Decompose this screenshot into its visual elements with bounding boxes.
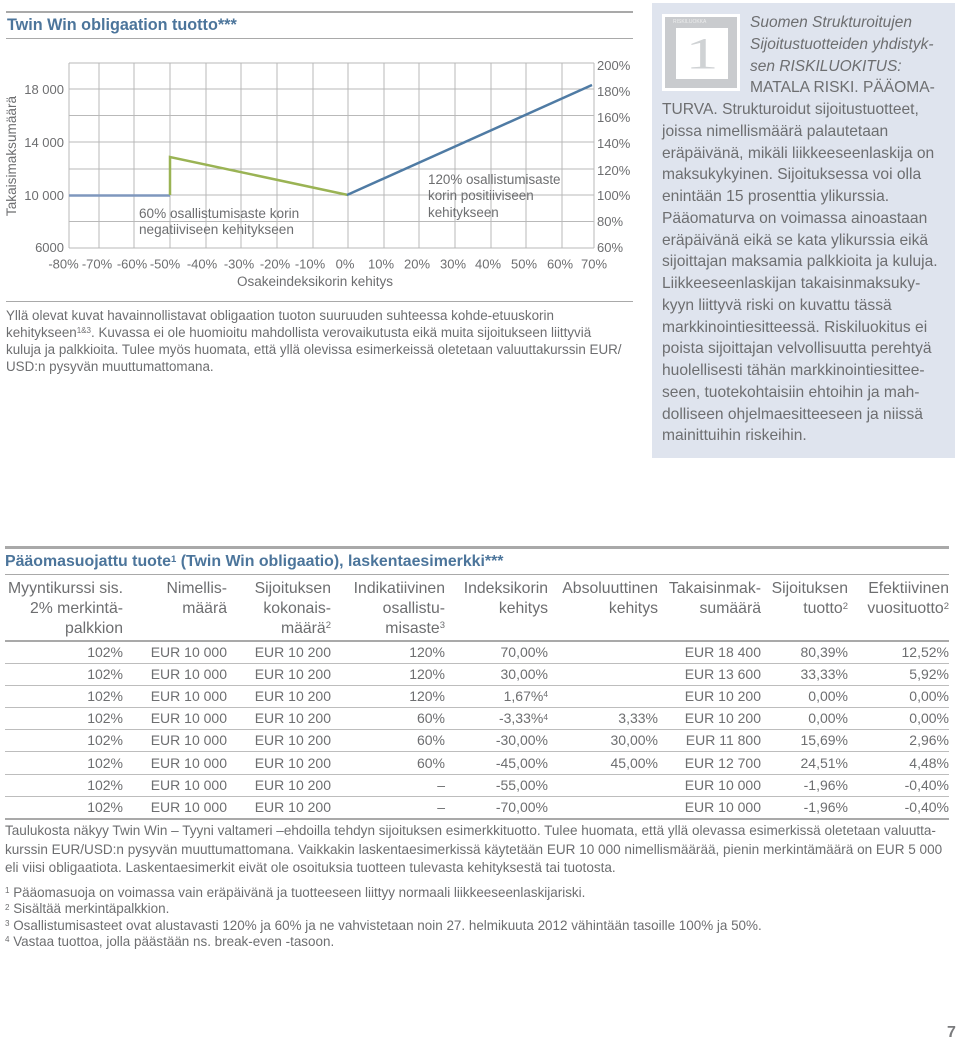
table: calculation examples: -55,00% bbox=[496, 777, 548, 793]
x axis labels: -60% bbox=[117, 256, 148, 272]
table: calculation examples: kehitys bbox=[499, 600, 548, 617]
heading: table title: Pääomasuojattu tuote1 (Twin Win obligaatio), laskentaesimerkki*** bbox=[5, 553, 503, 570]
table: calculation examples: EUR 10 000 bbox=[151, 644, 227, 660]
table: calculation examples: määrä2 bbox=[281, 620, 331, 637]
text: risk description: mainittuihin riskeihin. bbox=[662, 427, 807, 444]
table: calculation examples: 1,67%4 bbox=[504, 688, 548, 704]
text: table explanation: Taulukosta näkyy Twin Win – Tyyni valtameri –ehdoilla tehdyn sijoituksen esimerkkituotto. Tulee huomata, että yllä olevassa esimerkissä oletetaan valuutta- bbox=[5, 823, 936, 838]
table: calculation examples: 0,00% bbox=[808, 710, 848, 726]
text: footnotes: 4 Vastaa tuottoa, jolla päästään ns. break-even -tasoon. bbox=[5, 934, 334, 949]
right axis labels: 120% bbox=[597, 163, 631, 178]
text: table explanation: eli viisi obligaatiota. Laskentaesimerkit eivät ole osoituksia tuotteen tulevasta kehityksestä tai tuotosta. bbox=[5, 860, 616, 875]
table: calculation examples: 24,51% bbox=[801, 755, 848, 771]
right axis labels: 160% bbox=[597, 110, 631, 125]
text: table explanation bbox=[5, 823, 942, 875]
annotation: negative participation: negatiiviseen kehitykseen bbox=[139, 222, 294, 237]
text: chart explanation: USD:n pysyvän muuttumattomana. bbox=[6, 359, 214, 374]
table: calculation examples: EUR 10 200 bbox=[255, 799, 331, 815]
icon: risk class 1 bbox=[662, 14, 740, 91]
text: risk description: dolliseen ohjelmaesitteeseen ja niissä bbox=[662, 406, 923, 422]
table: calculation examples: EUR 10 000 bbox=[151, 732, 227, 748]
text: risk description: seen, tuotekohtaisiin ehtoihin ja mah- bbox=[662, 384, 919, 401]
table: calculation examples: – bbox=[437, 799, 445, 815]
table: calculation examples: EUR 10 200 bbox=[685, 688, 761, 704]
text: risk description: MATALA RISKI. PÄÄOMA- bbox=[750, 79, 935, 96]
table: calculation examples: 4,48% bbox=[909, 755, 949, 771]
table: calculation examples: Absoluuttinen bbox=[562, 580, 658, 597]
text: risk description: TURVA. Strukturoidut sijoitustuotteet, bbox=[662, 101, 919, 118]
panel: twin win chart section bbox=[4, 11, 633, 374]
text: footnotes: 2 Sisältää merkintäpalkkion. bbox=[5, 901, 169, 916]
table: calculation examples: 33,33% bbox=[801, 666, 848, 682]
x axis labels: 70% bbox=[581, 256, 607, 272]
table: calculation examples: EUR 10 000 bbox=[151, 688, 227, 704]
table: calculation examples: -3,33%4 bbox=[499, 710, 548, 726]
table: calculation examples: määrä bbox=[182, 600, 227, 617]
table: calculation examples: 12,52% bbox=[902, 644, 949, 660]
table: calculation examples: Myyntikurssi sis. bbox=[8, 580, 123, 597]
table: calculation examples: -0,40% bbox=[905, 799, 949, 815]
x axis title: Osakeindeksikorin kehitys bbox=[237, 274, 393, 289]
text: risk description: Pääomaturva on voimassa ainoastaan bbox=[662, 210, 927, 227]
table: calculation examples: 80,39% bbox=[801, 644, 848, 660]
table: calculation examples: 45,00% bbox=[611, 755, 658, 771]
right axis labels: 100% bbox=[597, 188, 631, 203]
table: calculation examples: osallistu- bbox=[383, 600, 445, 617]
panel: calculation example section bbox=[5, 546, 949, 949]
table: calculation examples: vuosituotto2 bbox=[867, 600, 949, 617]
panel: risk classification bbox=[652, 3, 955, 458]
text: risk description: eräpäivänä, mikäli liikkeeseenlaskija on bbox=[662, 144, 934, 162]
text: table explanation: kurssin EUR/USD:n pysyvän muuttumattomana. Vaikkakin laskentaesimerkissä käytetään EUR 10 000 nimellismäärää, pienin merkintämäärä on EUR 5 000 bbox=[5, 842, 942, 856]
x axis labels: 40% bbox=[475, 256, 501, 272]
table: calculation examples: EUR 12 700 bbox=[685, 755, 761, 771]
table: calculation examples: EUR 10 200 bbox=[255, 710, 331, 726]
text: risk description: joissa nimellismäärä palautetaan bbox=[662, 123, 888, 140]
table: calculation examples: EUR 10 200 bbox=[255, 755, 331, 771]
table: calculation examples: 2% merkintä- bbox=[30, 600, 123, 617]
text: risk description: Suomen Strukturoitujen bbox=[750, 14, 912, 31]
table: calculation examples: 15,69% bbox=[801, 732, 848, 748]
line chart bbox=[4, 58, 631, 289]
table: calculation examples: EUR 10 200 bbox=[255, 688, 331, 704]
table: calculation examples: kokonais- bbox=[263, 600, 331, 617]
table: calculation examples: kehitys bbox=[609, 600, 658, 617]
table: calculation examples: 3,33% bbox=[618, 710, 658, 726]
text: risk description: markkinointiesitteessä. Riskiluokitus ei bbox=[662, 318, 927, 336]
x axis labels: -10% bbox=[295, 256, 326, 272]
table: calculation examples: misaste3 bbox=[385, 620, 445, 637]
text: risk description: maksukykyinen. Sijoituksessa voi olla bbox=[662, 166, 921, 183]
table: calculation examples: -45,00% bbox=[496, 755, 548, 771]
table: calculation examples: 102% bbox=[87, 732, 123, 748]
left axis labels: 6000 bbox=[35, 240, 64, 255]
table: calculation examples: EUR 18 400 bbox=[685, 644, 761, 660]
table: calculation examples: tuotto2 bbox=[803, 600, 848, 617]
table: calculation examples: EUR 10 200 bbox=[255, 644, 331, 660]
right axis labels: 200% bbox=[597, 58, 631, 73]
table: calculation examples: 30,00% bbox=[611, 732, 658, 748]
table: calculation examples: EUR 10 000 bbox=[151, 755, 227, 771]
table: calculation examples: 102% bbox=[87, 644, 123, 660]
table: calculation examples: 60% bbox=[417, 755, 445, 771]
text: risk description: Liikkeeseenlaskijan takaisinmaksuky- bbox=[662, 275, 920, 292]
table: calculation examples: 0,00% bbox=[909, 688, 949, 704]
right axis labels: 60% bbox=[597, 240, 623, 255]
text: chart explanation: kuluja ja palkkioita. Tulee myös huomata, että yllä olevissa esimerkeissä oletetaan valuuttakurssin EUR/ bbox=[6, 342, 622, 357]
right axis labels: 180% bbox=[597, 84, 631, 99]
text: footnotes: 1 Pääomasuoja on voimassa vain eräpäivänä ja tuotteeseen liittyy normaali liikkeeseenlaskijariski. bbox=[5, 885, 585, 900]
x axis labels: 20% bbox=[404, 256, 430, 272]
table: calculation examples: EUR 11 800 bbox=[686, 732, 761, 748]
text: risk description: huolellisesti tähän markkinointiesittee- bbox=[662, 362, 925, 379]
left axis labels: 14 000 bbox=[24, 135, 64, 150]
table: calculation examples: Sijoituksen bbox=[255, 580, 331, 597]
left axis labels bbox=[24, 82, 64, 255]
heading: chart title: Twin Win obligaation tuotto*** bbox=[7, 16, 237, 34]
table: calculation examples: 120% bbox=[409, 688, 445, 704]
icon: risk class 1: RISKILUOKKA bbox=[673, 19, 706, 25]
table: calculation examples: -1,96% bbox=[804, 777, 848, 793]
table: calculation examples: Sijoituksen bbox=[772, 580, 848, 597]
table: calculation examples: 102% bbox=[87, 688, 123, 704]
x axis labels: -70% bbox=[82, 256, 113, 272]
table: calculation examples: EUR 10 000 bbox=[151, 666, 227, 682]
table: calculation examples: 102% bbox=[87, 777, 123, 793]
text: footnotes bbox=[5, 885, 762, 949]
right axis labels: 80% bbox=[597, 214, 623, 229]
x axis labels: 0% bbox=[336, 256, 355, 272]
x axis labels: -40% bbox=[187, 256, 218, 272]
text: risk description bbox=[662, 14, 938, 444]
left axis title: Takaisimaksumäärä bbox=[4, 96, 19, 216]
table: calculation examples: 102% bbox=[87, 666, 123, 682]
table: calculation examples: -30,00% bbox=[496, 732, 548, 748]
text: risk description: sijoittajan maksamia palkkioita ja kuluja. bbox=[662, 253, 938, 270]
text: footnotes: 3 Osallistumisasteet ovat alustavasti 120% ja 60% ja ne vahvistetaan noin 27. helmikuuta 2012 vähintään tasoille 100% ja 50%. bbox=[5, 918, 762, 933]
table: calculation examples: 30,00% bbox=[501, 666, 548, 682]
x axis labels: 10% bbox=[368, 256, 394, 272]
left axis labels: 10 000 bbox=[24, 188, 64, 203]
table: calculation examples: 0,00% bbox=[808, 688, 848, 704]
table: calculation examples: Indeksikorin bbox=[464, 580, 548, 597]
table: calculation examples: Indikatiivinen bbox=[354, 580, 445, 597]
text: chart explanation: kehitykseen1&3. Kuvassa ei ole huomioitu mahdollista verovaikutusta eikä muita sijoitukseen liittyviä bbox=[6, 325, 591, 340]
table: calculation examples: sumäärä bbox=[700, 600, 761, 617]
table: calculation examples: EUR 10 200 bbox=[255, 666, 331, 682]
right axis labels: 140% bbox=[597, 136, 631, 151]
table: calculation examples: -70,00% bbox=[496, 799, 548, 815]
table: calculation examples: 102% bbox=[87, 710, 123, 726]
right axis labels bbox=[597, 58, 631, 255]
table: calculation examples: 70,00% bbox=[501, 644, 548, 660]
table: calculation examples: EUR 10 200 bbox=[255, 732, 331, 748]
left axis labels: 18 000 bbox=[24, 82, 64, 97]
table: calculation examples: 120% bbox=[409, 666, 445, 682]
table: calculation examples: – bbox=[437, 777, 445, 793]
text: risk description: Sijoitustuotteiden yhdistyk- bbox=[750, 36, 934, 53]
table: calculation examples: EUR 10 000 bbox=[151, 777, 227, 793]
table: calculation examples: EUR 13 600 bbox=[685, 666, 761, 682]
table: calculation examples: Efektiivinen bbox=[868, 580, 949, 597]
blue flat line bbox=[69, 194, 170, 197]
table: calculation examples: EUR 10 200 bbox=[685, 710, 761, 726]
table: calculation examples: -0,40% bbox=[905, 777, 949, 793]
x axis labels: 30% bbox=[440, 256, 466, 272]
table: calculation examples: 102% bbox=[87, 755, 123, 771]
x axis labels: -50% bbox=[150, 256, 181, 272]
text: risk description: poista sijoittajan velvollisuutta perehtyä bbox=[662, 340, 932, 357]
table: calculation examples: 120% bbox=[409, 644, 445, 660]
x axis labels: 50% bbox=[511, 256, 537, 272]
table: calculation examples bbox=[5, 580, 949, 820]
table: calculation examples: 5,92% bbox=[909, 666, 949, 682]
table: calculation examples: EUR 10 000 bbox=[685, 799, 761, 815]
table: calculation examples: EUR 10 200 bbox=[255, 777, 331, 793]
table: calculation examples: 102% bbox=[87, 799, 123, 815]
icon: risk class 1: 1 bbox=[686, 29, 718, 78]
table: calculation examples: 60% bbox=[417, 710, 445, 726]
table: calculation examples: 2,96% bbox=[909, 732, 949, 748]
blue rising line bbox=[347, 85, 592, 195]
annotation: positive participation: kehitykseen bbox=[428, 205, 499, 220]
annotation: positive participation: 120% osallistumisaste bbox=[428, 172, 560, 187]
table: calculation examples: Nimellis- bbox=[166, 580, 227, 597]
text: risk description: enintään 15 prosenttia ylikurssia. bbox=[662, 188, 889, 205]
x axis labels: -80% bbox=[48, 256, 79, 272]
annotation: negative participation: 60% osallistumisaste korin bbox=[139, 206, 299, 221]
text: chart explanation: Yllä olevat kuvat havainnollistavat obligaation tuoton suuruuden suhteessa kohde-etuuskorin bbox=[6, 308, 554, 323]
x axis labels bbox=[48, 256, 607, 272]
text: risk description: kyyn liittyvä riski on kuvattu tässä bbox=[662, 297, 892, 314]
table: calculation examples: 60% bbox=[417, 732, 445, 748]
green line bbox=[170, 157, 348, 195]
table: calculation examples: Takaisinmak- bbox=[669, 580, 761, 597]
table: calculation examples: EUR 10 000 bbox=[151, 799, 227, 815]
table: calculation examples: EUR 10 000 bbox=[151, 710, 227, 726]
table: calculation examples: -1,96% bbox=[804, 799, 848, 815]
annotation: positive participation: korin positiiviseen bbox=[428, 188, 534, 203]
x axis labels: -20% bbox=[260, 256, 291, 272]
text: risk description: sen RISKILUOKITUS: bbox=[750, 58, 902, 74]
x axis labels: -30% bbox=[224, 256, 255, 272]
x axis labels: 60% bbox=[547, 256, 573, 272]
table: calculation examples: palkkion bbox=[65, 620, 123, 637]
text: risk description: eräpäivänä eikä se kata ylikurssia eikä bbox=[662, 232, 928, 248]
table: calculation examples: EUR 10 000 bbox=[685, 777, 761, 793]
text: chart explanation bbox=[6, 308, 622, 374]
table: calculation examples: 0,00% bbox=[909, 710, 949, 726]
